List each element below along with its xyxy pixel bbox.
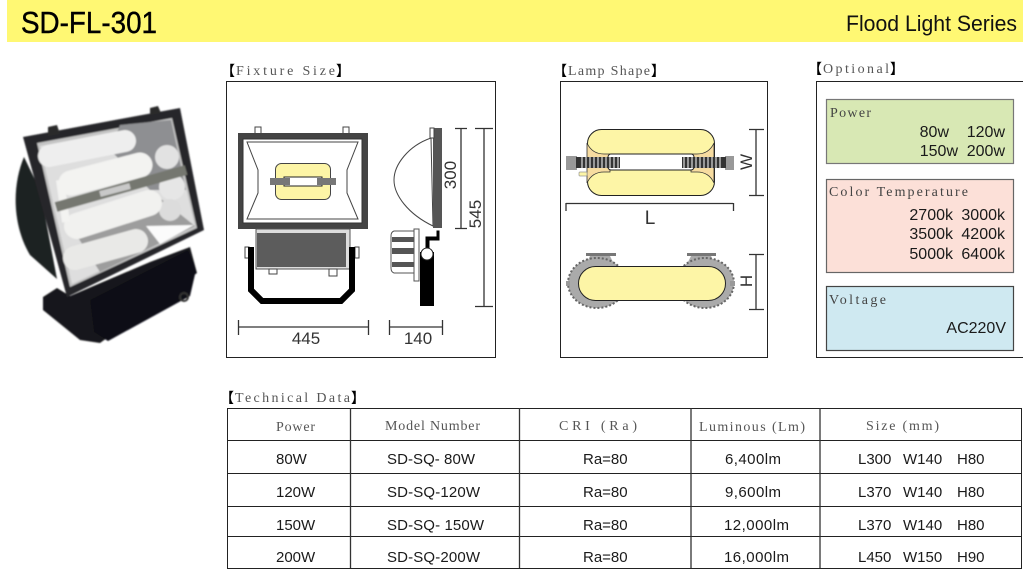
row: 200W [276,549,985,566]
dimension: 445 [238,320,368,348]
row: 200W: SD-SQ-200W [387,549,481,566]
row: 80W: SD-SQ- 80W [387,451,476,468]
option: color temperature: 4200k [961,226,1006,243]
row: 150W: SD-SQ- 150W [387,517,485,534]
option: color temperature: 6400k [961,246,1006,263]
front view of fixture [238,127,368,301]
option: voltage: Voltage [829,293,886,308]
heading: fixture size: 【 [221,63,235,79]
table header row: Size (mm) [866,419,939,434]
option: power: 80w [920,124,949,141]
dimension: 300 [441,128,467,228]
table header row: Model Number [385,419,480,434]
row: 200W: 16,000lm [724,549,789,566]
header band [7,0,1023,42]
table header row: Power [276,420,315,435]
heading: fixture size: 】 [336,63,350,79]
heading: lamp shape [553,63,665,79]
row: 120W [276,484,985,501]
row: 150W: W140 [903,517,942,534]
dimension: 445: 445 [292,329,320,348]
row: 80W: H80 [957,451,985,468]
row: 120W: SD-SQ-120W [387,484,481,501]
row: 200W: L450 [858,549,891,566]
row: 80W: W140 [903,451,942,468]
row: 150W: 12,000lm [724,517,789,534]
row: 150W: H80 [957,517,985,534]
dimension: H: H [737,275,756,287]
row: 200W: Ra=80 [583,549,628,566]
table header row: Luminous (Lm) [699,420,805,435]
product photo: flood light [16,106,204,343]
option: power: 200w [967,143,1005,160]
option: color temperature [826,180,1014,272]
row: 150W: 150W [276,517,316,534]
dimension: 140 [389,320,442,348]
row: 150W [276,517,985,534]
option: color temperature: 3000k [961,207,1006,224]
row: 200W: H90 [957,549,985,566]
dimension: 545: 545 [466,200,485,228]
row: 120W: Ra=80 [583,484,628,501]
heading: technical data: 】 [351,390,365,406]
dimension: L [566,203,734,229]
option: power: 150w [920,143,958,160]
option: color temperature: 3500k [909,226,954,243]
dimension: H [737,254,764,310]
heading: technical data: Technical Data [235,391,351,406]
table header row: CRI (Ra) [559,419,637,434]
dimension: L: L [645,208,655,229]
dimension: 140: 140 [404,329,432,348]
option: color temperature: Color Temperature [829,185,968,200]
table: technical data [227,408,1022,568]
row: 150W: Ra=80 [583,517,628,534]
option: power: Power [830,106,871,121]
heading: optional: Optional [823,62,889,77]
row: 120W: L370 [858,484,891,501]
row: 120W: W140 [903,484,942,501]
table header row [276,419,939,435]
tubes [49,141,125,156]
heading: lamp shape: 】 [651,63,665,79]
row: 80W: L300 [858,451,891,468]
row: 80W: Ra=80 [583,451,628,468]
panel: fixture size [226,82,496,358]
heading: lamp shape: 【 [553,63,567,79]
panel: optional [816,82,1023,358]
option: color temperature: 2700k [909,207,954,224]
title: SD-FL-301 [21,5,157,40]
panel: lamp shape [560,82,768,358]
dimension: W [737,129,764,196]
heading: optional [808,61,904,77]
row: 120W: H80 [957,484,985,501]
option: power: 120w [967,124,1005,141]
lamp top view [566,130,734,196]
option: color temperature: 5000k [909,246,954,263]
heading: fixture size: Fixture Size [236,64,335,79]
dimension: 545 [466,128,493,306]
row: 80W [276,451,985,468]
heading: optional: 【 [808,61,822,77]
heading: optional: 】 [890,61,904,77]
option: voltage: AC220V [946,320,1006,337]
option: power [826,100,1014,164]
side view of fixture [391,128,442,306]
heading: technical data: 【 [220,390,234,406]
row: 150W: L370 [858,517,891,534]
series name: Flood Light Series [846,11,1017,36]
row: 80W: 80W [276,451,308,468]
dimension: W: W [737,154,756,170]
heading: lamp shape: Lamp Shape [568,64,650,79]
row: 120W: 120W [276,484,316,501]
dimension: 300: 300 [441,161,460,189]
row: 80W: 6,400lm [725,451,781,468]
row: 200W: W150 [903,549,942,566]
lamp end view [566,253,735,308]
row: 200W: 200W [276,549,316,566]
row: 120W: 9,600lm [725,484,781,501]
option: voltage [826,286,1014,350]
